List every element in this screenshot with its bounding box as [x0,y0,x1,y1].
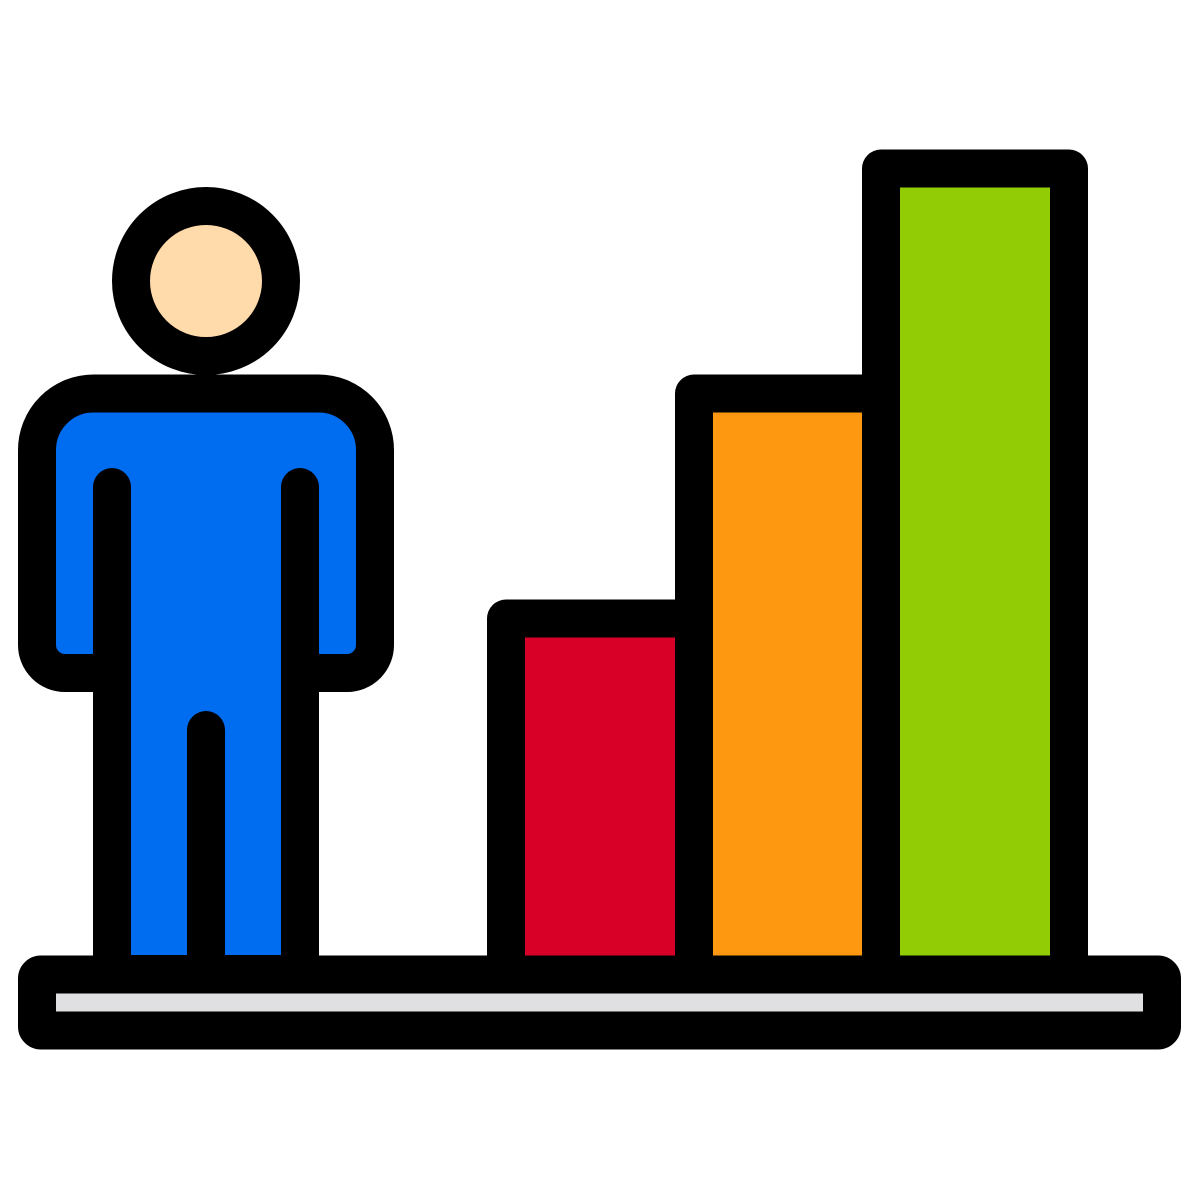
leg split line [187,730,225,970]
person body [37,394,375,974]
bar: red [506,618,694,974]
bar: orange [694,394,881,974]
bar chart [506,168,1069,974]
person head [131,206,281,356]
base platform [37,974,1162,1030]
bar: green [881,168,1069,974]
arm lines [93,487,131,673]
person figure [37,206,375,974]
